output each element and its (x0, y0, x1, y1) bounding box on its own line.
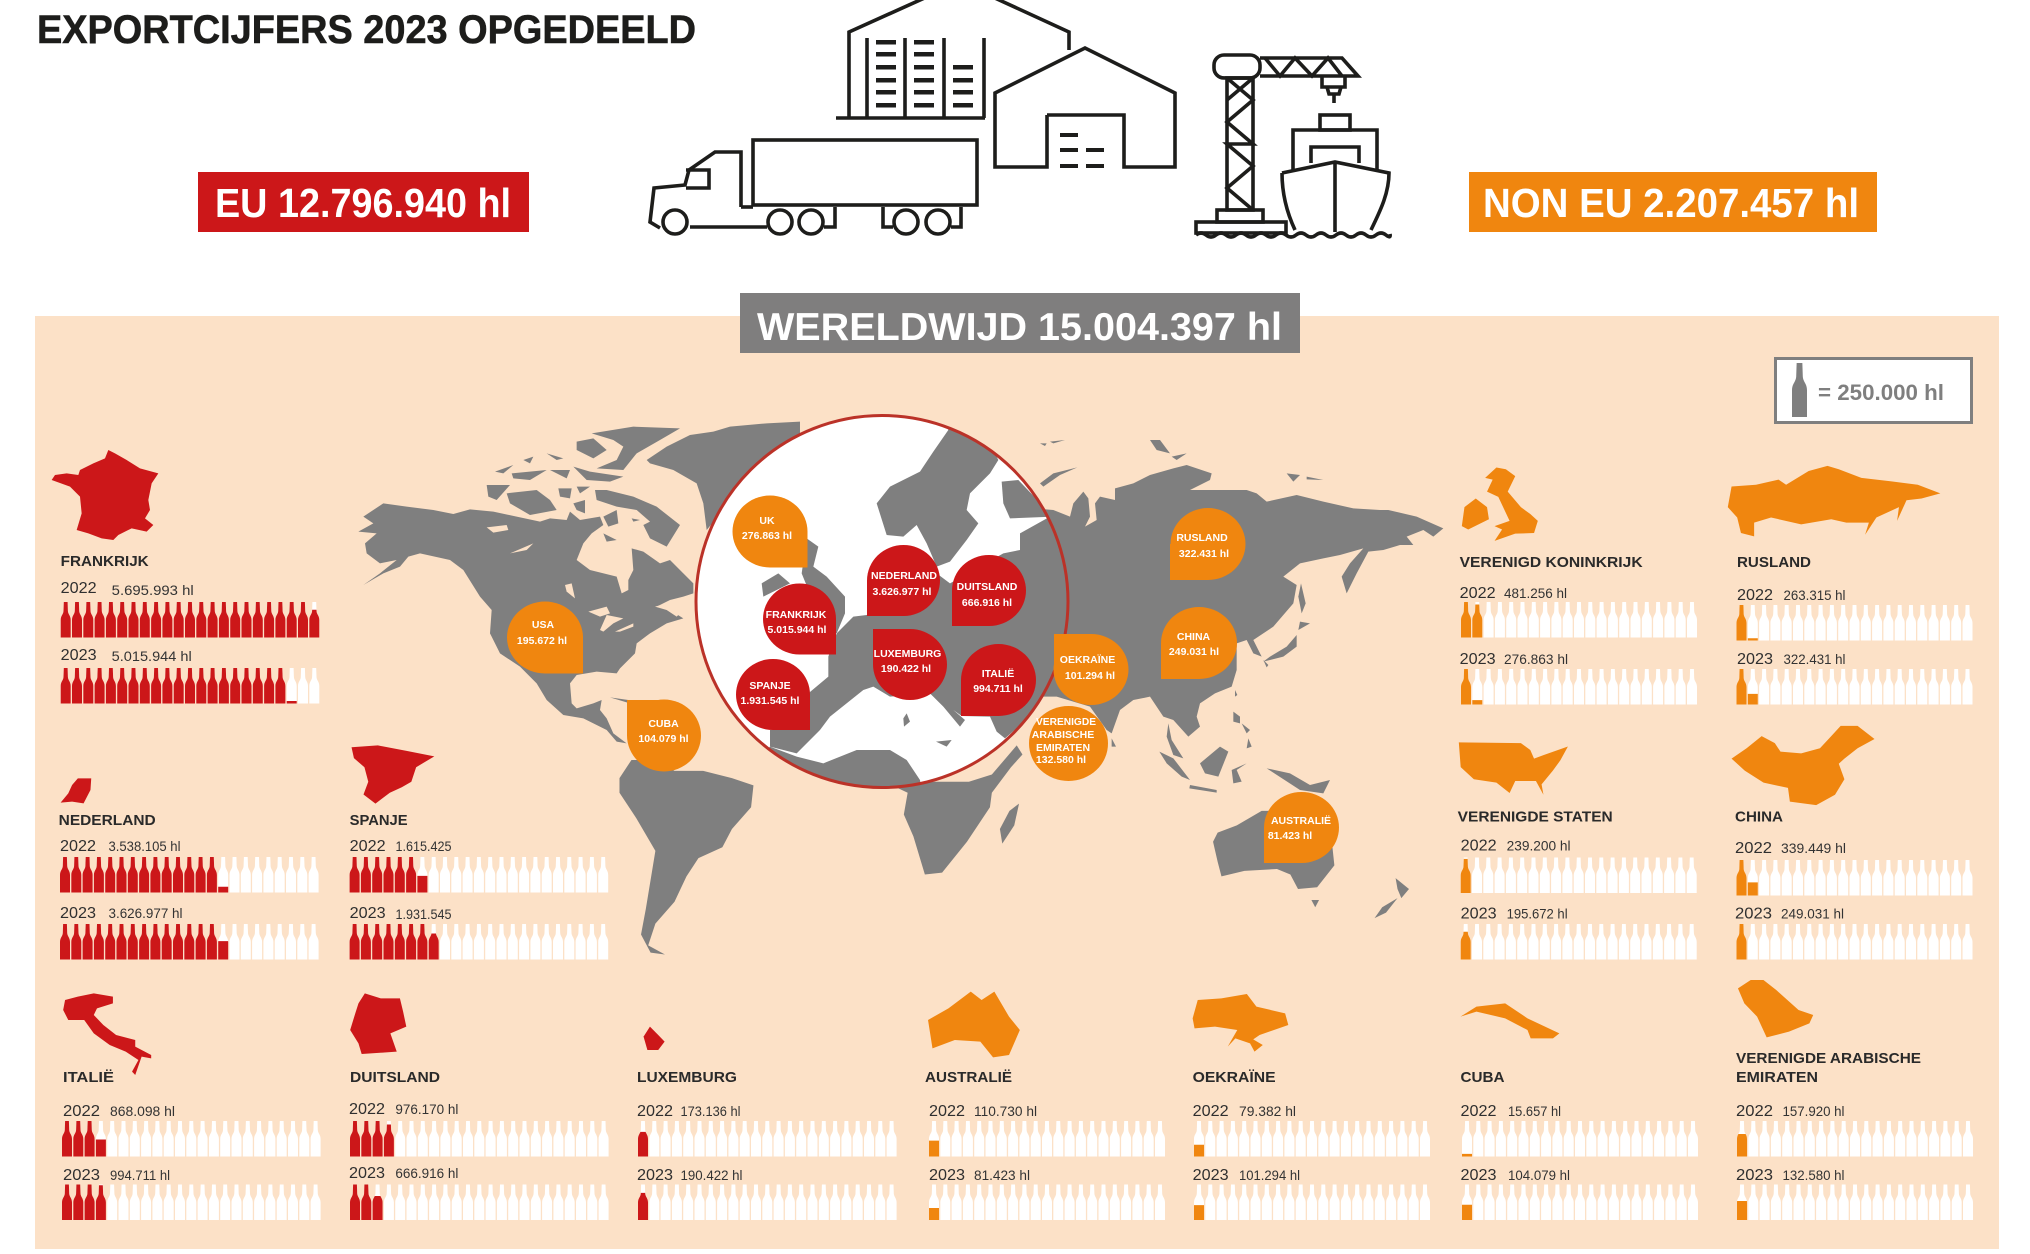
country: Nederland (59, 778, 319, 960)
country: Oekraïne: 2022 (1193, 1103, 1229, 1120)
country: Spanje: SPANJE (350, 812, 408, 829)
country: China: 2023 (1735, 906, 1772, 923)
marker: Cuba: CUBA (648, 718, 679, 730)
marker: Luxemburg: LUXEMBURG (874, 648, 941, 660)
marker: Luxemburg (873, 629, 947, 700)
marker: Spanje: 1.931.545 hl (741, 695, 800, 707)
marker: Spanje (736, 659, 810, 730)
map: Russia (1728, 466, 1940, 536)
country: Rusland: 2022 (1737, 587, 1773, 604)
country: Duitsland: 666.916 hl (395, 1166, 458, 1181)
country: Italië: 868.098 hl (110, 1104, 175, 1119)
country: Italië: 2022 (63, 1103, 100, 1120)
country: China: 2022 (1735, 840, 1772, 857)
country: Australië: 110.730 hl (974, 1104, 1037, 1119)
panel: world export map background (35, 316, 1999, 1249)
country: Frankrijk: 2023 (61, 647, 97, 664)
marker: UK: UK (759, 515, 775, 527)
country: Luxemburg: 2022 (637, 1103, 673, 1120)
country: Italië: 994.711 hl (110, 1168, 170, 1183)
country: Verenigde Staten (1458, 742, 1697, 960)
country: Spanje: 1.931.545 (396, 907, 452, 922)
country: Spanje: 2022 (350, 838, 386, 855)
country: Verenigde Arabische Emiraten: 132.580 hl (1782, 1168, 1844, 1183)
country: Nederland: 3.538.105 hl (108, 839, 180, 854)
marker: Oekraïne: 101.294 hl (1065, 670, 1115, 682)
marker: USA: 195.672 hl (517, 635, 567, 647)
country: Verenigd Koninkrijk: 276.863 hl (1504, 652, 1568, 667)
country: Australië: AUSTRALIË (925, 1069, 1012, 1086)
marker: Cuba (627, 700, 701, 772)
country: Frankrijk: 5.695.993 hl (112, 583, 194, 598)
country: Spanje (350, 745, 608, 960)
country: Verenigde Arabische Emiraten (1736, 980, 1973, 1220)
country: Verenigd Koninkrijk (1460, 468, 1697, 704)
marker: Duitsland (952, 555, 1026, 626)
country: China: CHINA (1735, 808, 1783, 826)
country: Cuba: 15.657 hl (1508, 1104, 1561, 1119)
marker: Rusland: RUSLAND (1176, 532, 1228, 544)
map: Europe inset circle (696, 416, 1083, 803)
country: Italië: 2023 (63, 1167, 100, 1184)
worldwide total badge: WERELDWIJD 15.004.397 hl (757, 306, 1282, 349)
country: Verenigde Arabische Emiraten: 2023 (1736, 1167, 1773, 1184)
marker: Duitsland: 666.916 hl (962, 597, 1012, 609)
marker: UK (732, 496, 808, 568)
title: EXPORTCIJFERS 2023 OPGEDEELD (37, 8, 696, 52)
marker: Oekraïne (1054, 634, 1128, 705)
country: China: 339.449 hl (1781, 841, 1846, 856)
map: South America and Madagascar (619, 760, 1019, 954)
marker: Nederland (867, 545, 940, 616)
map: Netherlands (61, 778, 91, 803)
country: Frankrijk: 2022 (61, 580, 97, 597)
country: Luxemburg: LUXEMBURG (637, 1069, 737, 1086)
marker: Rusland (1170, 508, 1246, 580)
country: Luxemburg (637, 1027, 897, 1220)
country: Cuba: CUBA (1460, 1069, 1505, 1086)
marker: Frankrijk: FRANKRIJK (766, 609, 827, 621)
country: Australië: 2023 (929, 1167, 965, 1184)
country: Rusland (1728, 466, 1972, 704)
marker: Australië (1264, 792, 1339, 863)
marker: Nederland: 3.626.977 hl (873, 586, 932, 598)
country: Oekraïne (1193, 994, 1430, 1220)
map: Australia (928, 992, 1020, 1057)
country: Verenigd Koninkrijk: VERENIGD KONINKRIJK (1460, 554, 1643, 571)
country: Rusland: 322.431 hl (1784, 652, 1846, 667)
map: Arabian peninsula (1738, 980, 1813, 1037)
country: Australië (925, 992, 1165, 1220)
marker: Cuba: 104.079 hl (638, 733, 689, 745)
marker: China: 249.031 hl (1169, 646, 1219, 658)
country: Duitsland: DUITSLAND (350, 1069, 440, 1086)
map: United Kingdom and Ireland (1462, 468, 1538, 541)
marker: Verenigde Arabische Emiraten: VERENIGDE (1036, 716, 1096, 728)
marker: UK: 276.863 hl (742, 530, 792, 542)
icon: truck (650, 140, 977, 234)
country: Cuba (1460, 1003, 1698, 1220)
country: Verenigde Staten: 2023 (1461, 906, 1497, 923)
country: Verenigde Arabische Emiraten: 157.920 hl (1782, 1104, 1844, 1119)
icon: rack warehouse (836, 0, 1069, 118)
country: Luxemburg: 190.422 hl (680, 1168, 742, 1183)
map: United States (1459, 742, 1568, 795)
icon: warehouse with door (995, 48, 1175, 168)
country: Verenigd Koninkrijk: 2023 (1460, 651, 1496, 668)
country: Nederland: 2023 (60, 905, 96, 922)
map: China (1732, 726, 1875, 805)
marker: Australië: AUSTRALIË (1271, 814, 1331, 827)
marker: Italië: ITALIË (982, 667, 1014, 680)
EU total badge: EU 12.796.940 hl (215, 180, 511, 226)
country: Verenigde Staten: 2022 (1461, 838, 1497, 854)
marker: Italië: 994.711 hl (973, 683, 1023, 695)
map: Ukraine (1193, 994, 1288, 1052)
country: Verenigde Staten: 239.200 hl (1507, 838, 1571, 854)
country: Verenigde Staten: VERENIGDE STATEN (1458, 808, 1613, 826)
worldwide total badge (740, 293, 1300, 353)
country: Nederland: 2022 (60, 838, 96, 855)
map: Africa and Oceania (885, 745, 1409, 918)
country: Cuba: 2023 (1460, 1167, 1497, 1184)
country: Oekraïne: 2023 (1193, 1167, 1229, 1184)
marker: Oekraïne: OEKRAÏNE (1060, 653, 1115, 666)
world map (358, 422, 1443, 954)
marker: China (1161, 607, 1237, 679)
country: Verenigde Arabische Emiraten: 2022 (1736, 1103, 1773, 1120)
marker: Frankrijk: 5.015.944 hl (768, 624, 827, 636)
country: Spanje: 1.615.425 (396, 839, 452, 854)
country: Spanje: 2023 (350, 905, 386, 922)
marker: China: CHINA (1177, 631, 1211, 643)
marker: Spanje: SPANJE (749, 680, 791, 692)
icon: harbour crane (1196, 55, 1390, 237)
country: Luxemburg: 2023 (637, 1167, 673, 1184)
country: Frankrijk (52, 450, 319, 704)
country: Cuba: 104.079 hl (1508, 1168, 1570, 1183)
country: Verenigde Arabische Emiraten: VERENIGDE ARABISCHE (1736, 1050, 1921, 1067)
NON EU total badge: NON EU 2.207.457 hl (1483, 180, 1859, 226)
country: Verenigde Arabische Emiraten: EMIRATEN (1736, 1069, 1818, 1086)
marker: Duitsland: DUITSLAND (957, 581, 1018, 593)
country: Rusland: 2023 (1737, 651, 1773, 668)
country: Rusland: 263.315 hl (1784, 588, 1846, 603)
legend: bottle equals 250.000 hl (1776, 358, 1972, 422)
country: Oekraïne: 101.294 hl (1239, 1168, 1300, 1183)
map: Germany (350, 993, 406, 1054)
marker: Verenigde Arabische Emiraten: 132.580 hl (1036, 754, 1086, 766)
map: North America and Greenland (358, 422, 800, 743)
country: Duitsland: 976.170 hl (395, 1102, 458, 1117)
country: Verenigd Koninkrijk: 2022 (1460, 585, 1496, 602)
country: Duitsland: 2023 (349, 1165, 385, 1182)
marker: Australië: 81.423 hl (1268, 830, 1312, 842)
map: Luxembourg (644, 1027, 665, 1050)
country: Frankrijk: FRANKRIJK (61, 553, 149, 570)
country: Duitsland: 2022 (349, 1101, 385, 1118)
country: Duitsland (349, 993, 609, 1220)
map: Italy (63, 993, 151, 1075)
marker: Verenigde Arabische Emiraten: EMIRATEN (1036, 742, 1090, 754)
country: Italië (62, 993, 321, 1220)
country: Australië: 2022 (929, 1103, 965, 1120)
legend: bottle equals 250.000 hl: = 250.000 hl (1818, 380, 1944, 405)
map: Cuba (1461, 1003, 1559, 1038)
country: Verenigde Staten: 195.672 hl (1507, 907, 1568, 922)
country: Nederland: 3.626.977 hl (108, 906, 182, 921)
marker: Luxemburg: 190.422 hl (881, 663, 931, 675)
country: China: 249.031 hl (1781, 907, 1844, 922)
map: Spain (352, 745, 434, 804)
marker: USA: USA (532, 619, 555, 631)
marker: USA (507, 602, 583, 674)
country: Luxemburg: 173.136 hl (680, 1104, 740, 1119)
country: China (1732, 726, 1972, 960)
marker: Rusland: 322.431 hl (1179, 548, 1229, 560)
country: Oekraïne: 79.382 hl (1239, 1104, 1296, 1119)
country: Frankrijk: 5.015.944 hl (112, 649, 192, 664)
map: France (52, 450, 158, 540)
marker: Italië (961, 644, 1036, 716)
icon: container ship (1282, 115, 1389, 232)
country: Australië: 81.423 hl (974, 1168, 1030, 1183)
country: Cuba: 2022 (1460, 1103, 1497, 1120)
country: Italië: ITALIË (63, 1069, 114, 1086)
map: Eurasia and Southeast Asia (1007, 440, 1443, 793)
marker: Verenigde Arabische Emiraten (1029, 706, 1108, 781)
country: Verenigd Koninkrijk: 481.256 hl (1504, 586, 1567, 601)
country: Rusland: RUSLAND (1737, 554, 1811, 571)
marker: Frankrijk (763, 584, 836, 654)
marker: Verenigde Arabische Emiraten: ARABISCHE (1032, 729, 1094, 741)
country: Nederland: NEDERLAND (59, 812, 156, 829)
country: Oekraïne: OEKRAÏNE (1193, 1069, 1276, 1086)
marker: Nederland: NEDERLAND (871, 570, 937, 582)
